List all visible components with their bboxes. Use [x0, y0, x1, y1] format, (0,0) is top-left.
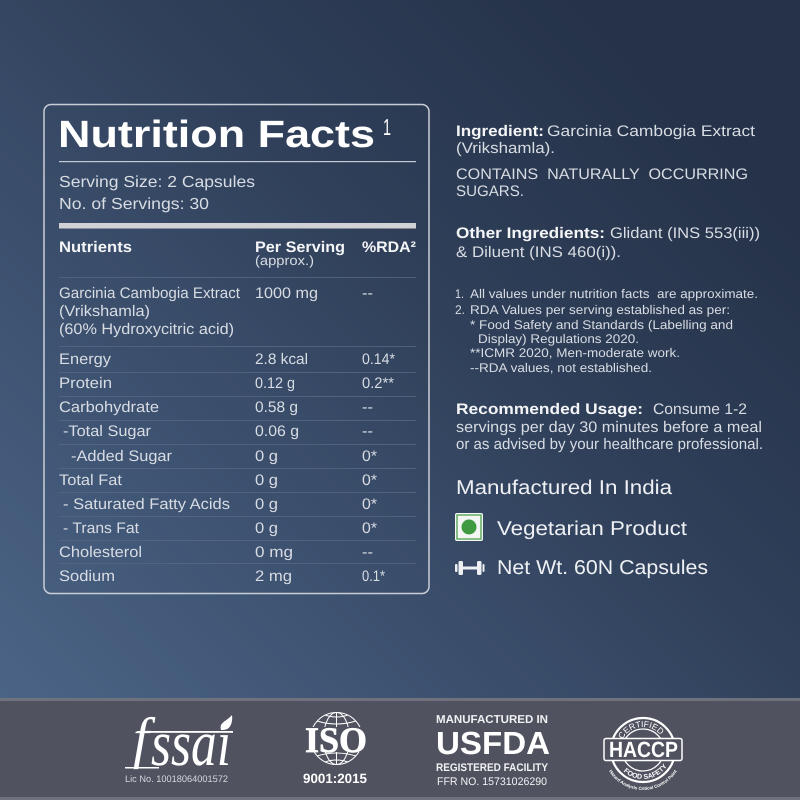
row: total fat	[59, 472, 377, 489]
sugars statement: CONTAINS NATURALLY OCCURRING	[456, 166, 748, 183]
footnotes: 1.	[455, 287, 464, 301]
row: garcinia: 1000 mg	[255, 285, 318, 302]
row: energy: 2.8 kcal	[255, 351, 308, 368]
row: total sugar: 0.06 g	[255, 423, 299, 440]
icon: vegetarian mark	[455, 513, 483, 541]
row: energy: 0.14*	[362, 351, 395, 368]
row: added sugar	[71, 448, 377, 465]
row: protein: Protein	[59, 375, 112, 392]
row: added sugar: -Added Sugar	[71, 448, 172, 465]
footnotes: --RDA values, not established.	[470, 361, 652, 375]
logo: iso: 9001:2015	[303, 771, 367, 786]
logo: haccp: HACCP	[609, 737, 678, 762]
row: protein: 0.2**	[362, 375, 394, 392]
panel border	[44, 104, 429, 594]
row: cholesterol	[59, 544, 373, 561]
other ingredients text: Glidant (INS 553(iii))	[610, 225, 760, 242]
serving information	[59, 174, 255, 213]
logo: iso	[303, 712, 369, 786]
logo: fssai: Lic No. 10018064001572	[125, 774, 228, 785]
recommended usage: Recommended Usage:	[456, 401, 643, 418]
row: garcinia	[59, 285, 373, 338]
table header: Per Serving	[255, 239, 345, 256]
other ingredients text: Other Ingredients:	[456, 225, 605, 242]
logo: haccp: FOOD SAFETY	[624, 763, 666, 779]
row: energy: Energy	[59, 351, 111, 368]
vegetarian product: Vegetarian Product	[497, 518, 687, 540]
panel: nutrition facts	[44, 104, 429, 594]
recommended usage: servings per day 30 minutes before a meal	[456, 419, 762, 436]
certification band	[0, 698, 800, 800]
logo: usfda: FFR NO. 15731026290	[437, 776, 547, 788]
logo: haccp	[603, 716, 683, 790]
row: cholesterol: --	[362, 544, 373, 561]
row: saturated fatty acids: 0*	[362, 496, 377, 513]
ingredient text	[456, 123, 756, 157]
row: cholesterol: Cholesterol	[59, 544, 142, 561]
row: saturated fatty acids: - Saturated Fatty Acids	[63, 496, 230, 513]
row: total fat: Total Fat	[59, 472, 123, 489]
row: trans fat: 0 g	[255, 520, 278, 537]
row: garcinia: (Vrikshamla)	[59, 303, 150, 320]
manufactured in india: Manufactured In India	[456, 477, 673, 499]
sugars statement	[456, 166, 748, 200]
row: carbohydrate: 0.58 g	[255, 399, 298, 416]
footnotes: * Food Safety and Standards (Labelling and	[470, 318, 733, 332]
ingredient text: (Vrikshamla).	[456, 140, 555, 157]
row: saturated fatty acids	[63, 496, 377, 513]
row: garcinia: (60% Hydroxycitric acid)	[59, 321, 234, 338]
footnotes: 2.	[455, 303, 465, 317]
row: carbohydrate: Carbohydrate	[59, 399, 159, 416]
row: garcinia: --	[362, 285, 373, 302]
logo: usfda: MANUFACTURED IN	[436, 714, 548, 726]
table header	[59, 239, 416, 268]
other ingredients text	[456, 225, 760, 261]
row: carbohydrate	[59, 399, 373, 416]
logo: iso: ISO	[305, 720, 367, 760]
row: trans fat: - Trans Fat	[63, 520, 140, 537]
row: energy	[59, 351, 395, 368]
table header: (approx.)	[255, 253, 314, 268]
row: sodium	[59, 568, 385, 585]
row: protein	[59, 375, 394, 392]
row: protein: 0.12 g	[255, 375, 295, 392]
ingredient text: Ingredient:	[456, 123, 544, 140]
logo: haccp: Hazard Analysis Critical Control Point	[609, 770, 677, 790]
row: sodium: 0.1*	[362, 568, 385, 585]
serving information: No. of Servings: 30	[59, 196, 209, 213]
logo: fssai: f	[133, 707, 156, 770]
row: sodium: Sodium	[59, 568, 115, 585]
row: total sugar	[63, 423, 373, 440]
logo: fssai: ssai	[151, 708, 231, 780]
logo: haccp: CERTIFIED	[618, 721, 664, 738]
row: sodium: 2 mg	[255, 568, 292, 585]
footnotes: All values under nutrition facts are approximate.	[470, 287, 758, 301]
row: added sugar: 0*	[362, 448, 377, 465]
table header: %RDA²	[362, 239, 416, 256]
table header: Nutrients	[59, 239, 132, 256]
logo: usfda: USFDA	[436, 725, 550, 761]
title: Nutrition Facts	[58, 114, 375, 156]
row: total sugar: -Total Sugar	[63, 423, 151, 440]
row: total sugar: --	[362, 423, 373, 440]
row: carbohydrate: --	[362, 399, 373, 416]
serving information: Serving Size: 2 Capsules	[59, 174, 255, 191]
logo: usfda: REGISTERED FACILITY	[436, 762, 549, 774]
row: garcinia: Garcinia Cambogia Extract	[59, 285, 241, 302]
footnotes: RDA Values per serving established as per:	[470, 303, 730, 317]
row: total fat: 0 g	[255, 472, 278, 489]
recommended usage	[456, 401, 763, 453]
icon: dumbbell	[455, 561, 484, 575]
row: cholesterol: 0 mg	[255, 544, 293, 561]
logo: usfda	[436, 714, 550, 788]
footnotes	[455, 287, 758, 375]
recommended usage: Consume 1-2	[653, 401, 747, 418]
row: total fat: 0*	[362, 472, 377, 489]
recommended usage: or as advised by your healthcare professional.	[456, 436, 763, 453]
row: trans fat	[63, 520, 377, 537]
logo: fssai	[125, 707, 233, 785]
net weight: Net Wt. 60N Capsules	[497, 557, 708, 579]
ingredient text: Garcinia Cambogia Extract	[547, 123, 756, 140]
title: 1	[383, 114, 391, 140]
footnotes: Display) Regulations 2020.	[478, 332, 639, 346]
other ingredients text: & Diluent (INS 460(i)).	[456, 244, 621, 261]
sugars statement: SUGARS.	[456, 183, 524, 200]
row: saturated fatty acids: 0 g	[255, 496, 278, 513]
row: added sugar: 0 g	[255, 448, 278, 465]
row: trans fat: 0*	[362, 520, 377, 537]
footnotes: **ICMR 2020, Men-moderate work.	[470, 346, 680, 360]
